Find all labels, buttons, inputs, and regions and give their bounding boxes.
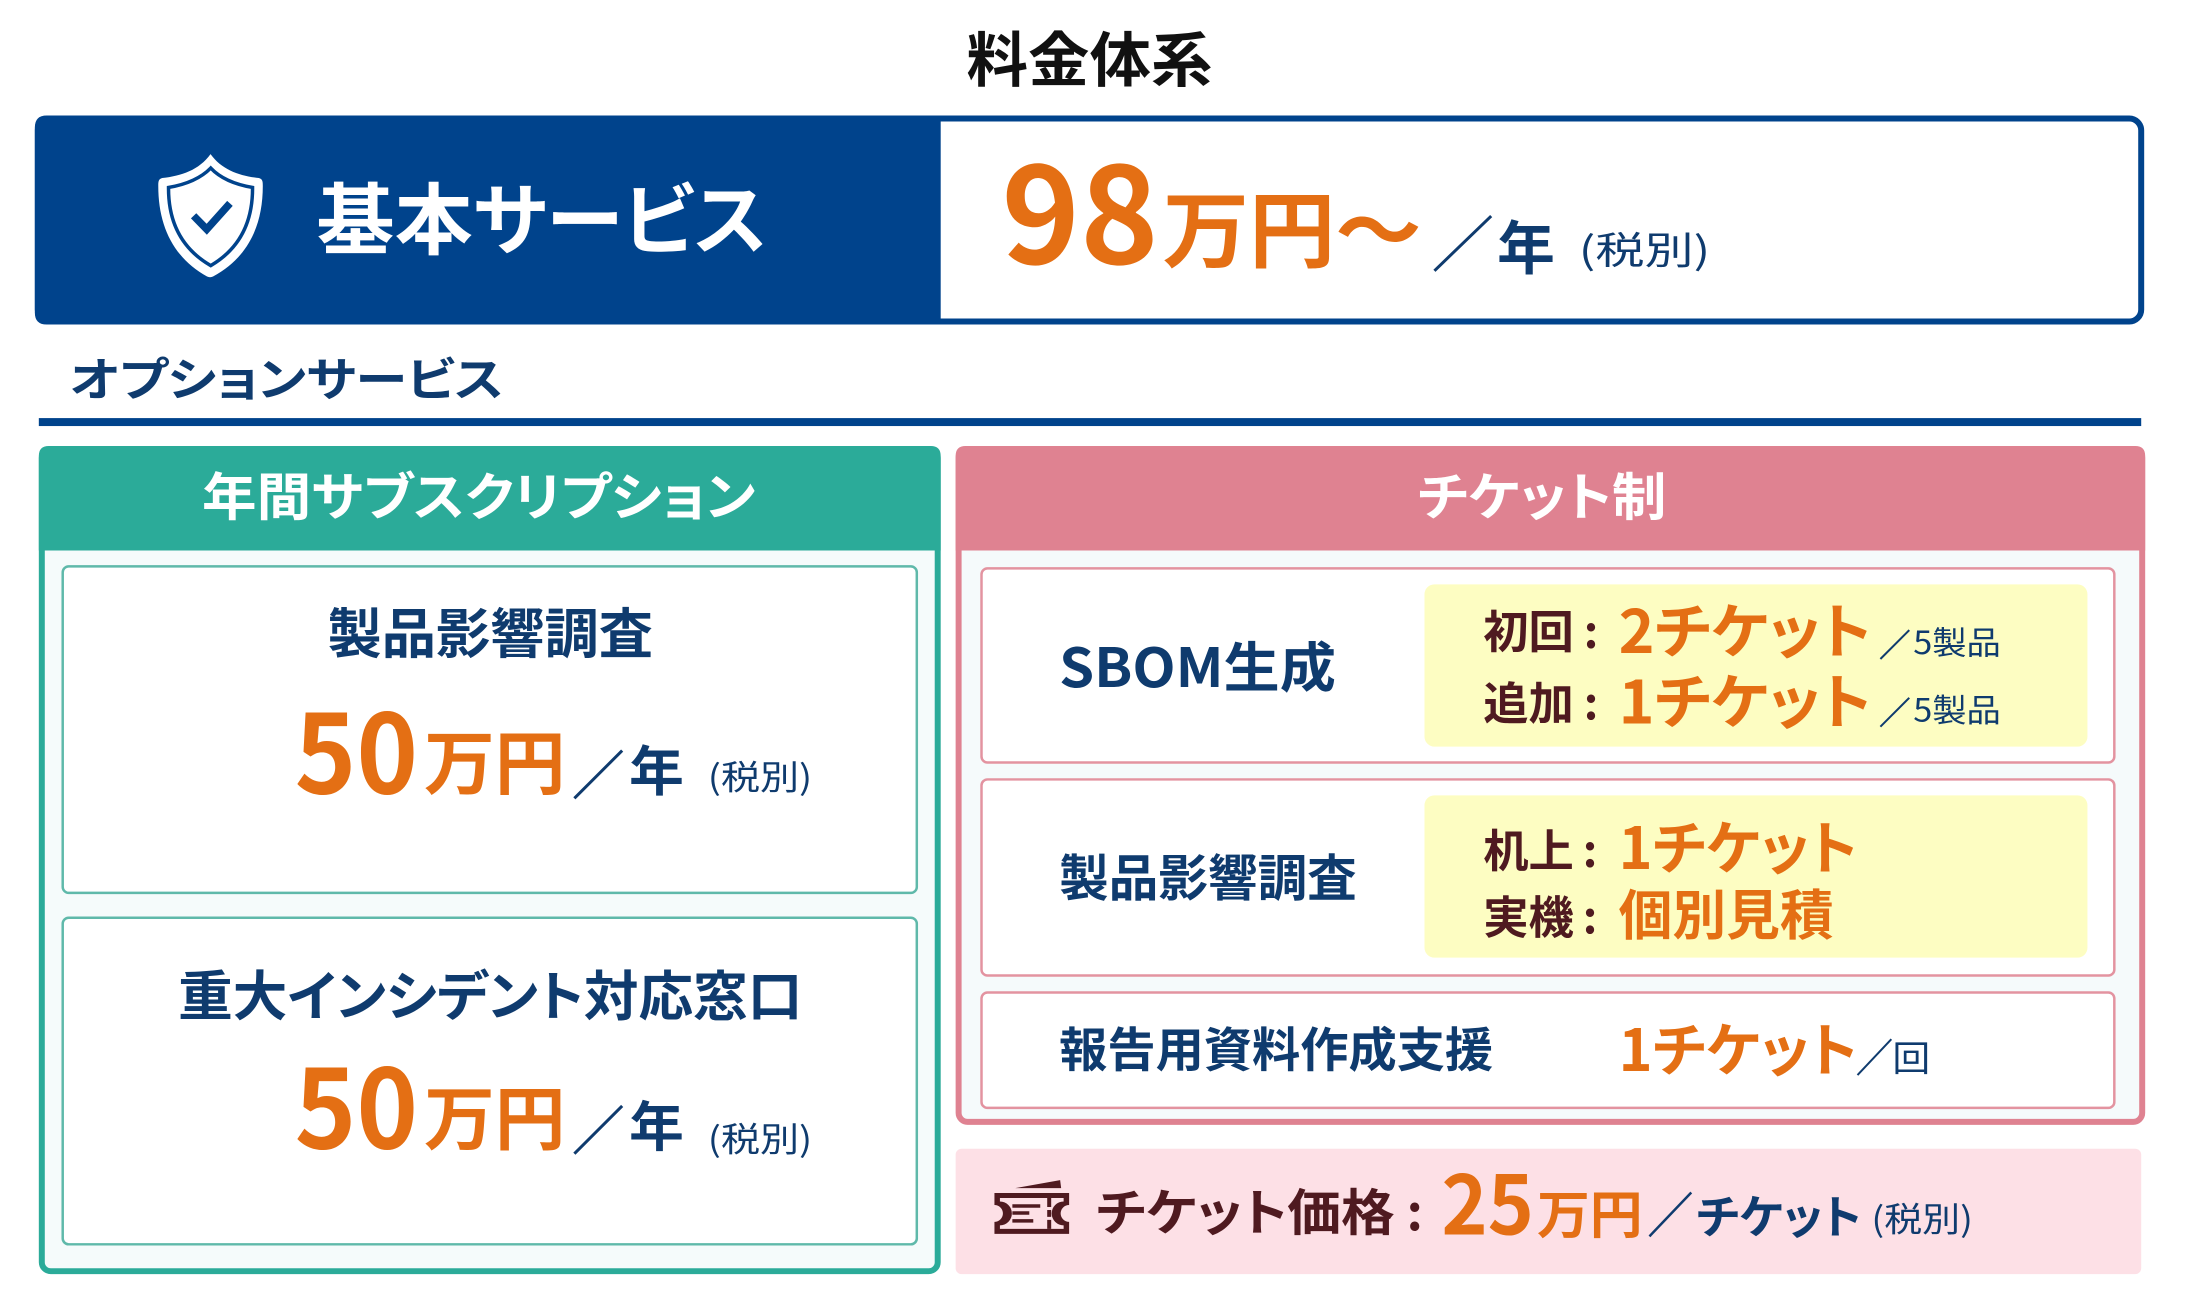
card: product impact survey: 万円	[424, 708, 565, 809]
row: SBOM generation: 5製品	[1913, 686, 2001, 732]
row: product impact survey: :	[1583, 815, 1597, 880]
row: SBOM generation: :	[1584, 596, 1598, 661]
card: critical incident desk: 50	[295, 1022, 418, 1181]
row: SBOM generation: 5製品	[1913, 618, 2001, 664]
row: product impact survey	[982, 779, 2114, 976]
heading: basic service: 基本サービス	[317, 159, 767, 271]
row: SBOM generation	[982, 568, 2114, 763]
panel: ticket price: チケット	[1696, 1181, 1861, 1247]
card: critical incident desk: 万円	[424, 1064, 565, 1165]
heading: ticket system: チケット制	[1418, 456, 1666, 531]
panel: ticket price: チケット価格	[1096, 1173, 1395, 1245]
panel: ticket price: 万円	[1537, 1173, 1642, 1248]
row: SBOM generation: SBOM生成	[1059, 626, 1336, 703]
row: report materials support	[982, 992, 2114, 1108]
panel: ticket price: :	[1407, 1173, 1423, 1245]
row: SBOM generation: :	[1584, 668, 1598, 733]
row: report materials support: 1チケット	[1619, 1004, 1857, 1088]
card: product impact survey: 年	[629, 729, 684, 806]
panel: ticket price	[956, 1139, 2141, 1274]
heading: option services: オプションサービス	[70, 344, 504, 410]
price: basic service: 年	[1497, 202, 1555, 286]
icon: shield	[158, 154, 263, 277]
icon: ticket	[994, 1180, 1069, 1234]
row: product impact survey: 製品影響調査	[1059, 839, 1357, 911]
panel: ticket system	[956, 446, 2145, 1122]
row: SBOM generation: 初回	[1483, 596, 1574, 661]
price: basic service: 万円〜	[1163, 165, 1421, 286]
row: SBOM generation: 追加	[1483, 668, 1574, 733]
panel: annual subscription	[39, 446, 941, 1271]
row: SBOM generation: 2チケット	[1619, 585, 1871, 671]
title: 料金体系	[967, 14, 1212, 100]
row: product impact survey: 1チケット	[1619, 802, 1857, 886]
price: basic service	[1001, 110, 1710, 303]
card: critical incident desk	[63, 918, 917, 1244]
card: product impact survey: (税別)	[708, 750, 812, 799]
row: report materials support: 回	[1892, 1030, 1930, 1082]
price: basic service: (税別)	[1579, 220, 1710, 275]
card: critical incident desk: (税別)	[708, 1113, 812, 1162]
row: product impact survey: 実機	[1483, 882, 1574, 947]
row: product impact survey: :	[1583, 882, 1597, 947]
panel: basic service	[35, 110, 2141, 325]
panel: ticket price: (税別)	[1871, 1192, 1973, 1241]
panel: ticket price: 25	[1441, 1139, 1534, 1258]
row: report materials support: 報告用資料作成支援	[1059, 1012, 1493, 1081]
card: product impact survey: 製品影響調査	[328, 592, 653, 669]
price: basic service: 98	[1001, 110, 1159, 303]
card: critical incident desk: 年	[629, 1085, 684, 1162]
row: product impact survey: 個別見積	[1619, 874, 1834, 951]
heading: annual subscription: 年間サブスクリプション	[202, 456, 756, 531]
row: product impact survey: 机上	[1483, 815, 1574, 880]
card: critical incident desk: 重大インシデント対応窓口	[178, 954, 802, 1031]
card: product impact survey: 50	[295, 666, 418, 825]
card: product impact survey	[63, 566, 917, 893]
row: SBOM generation: 1チケット	[1619, 656, 1871, 742]
